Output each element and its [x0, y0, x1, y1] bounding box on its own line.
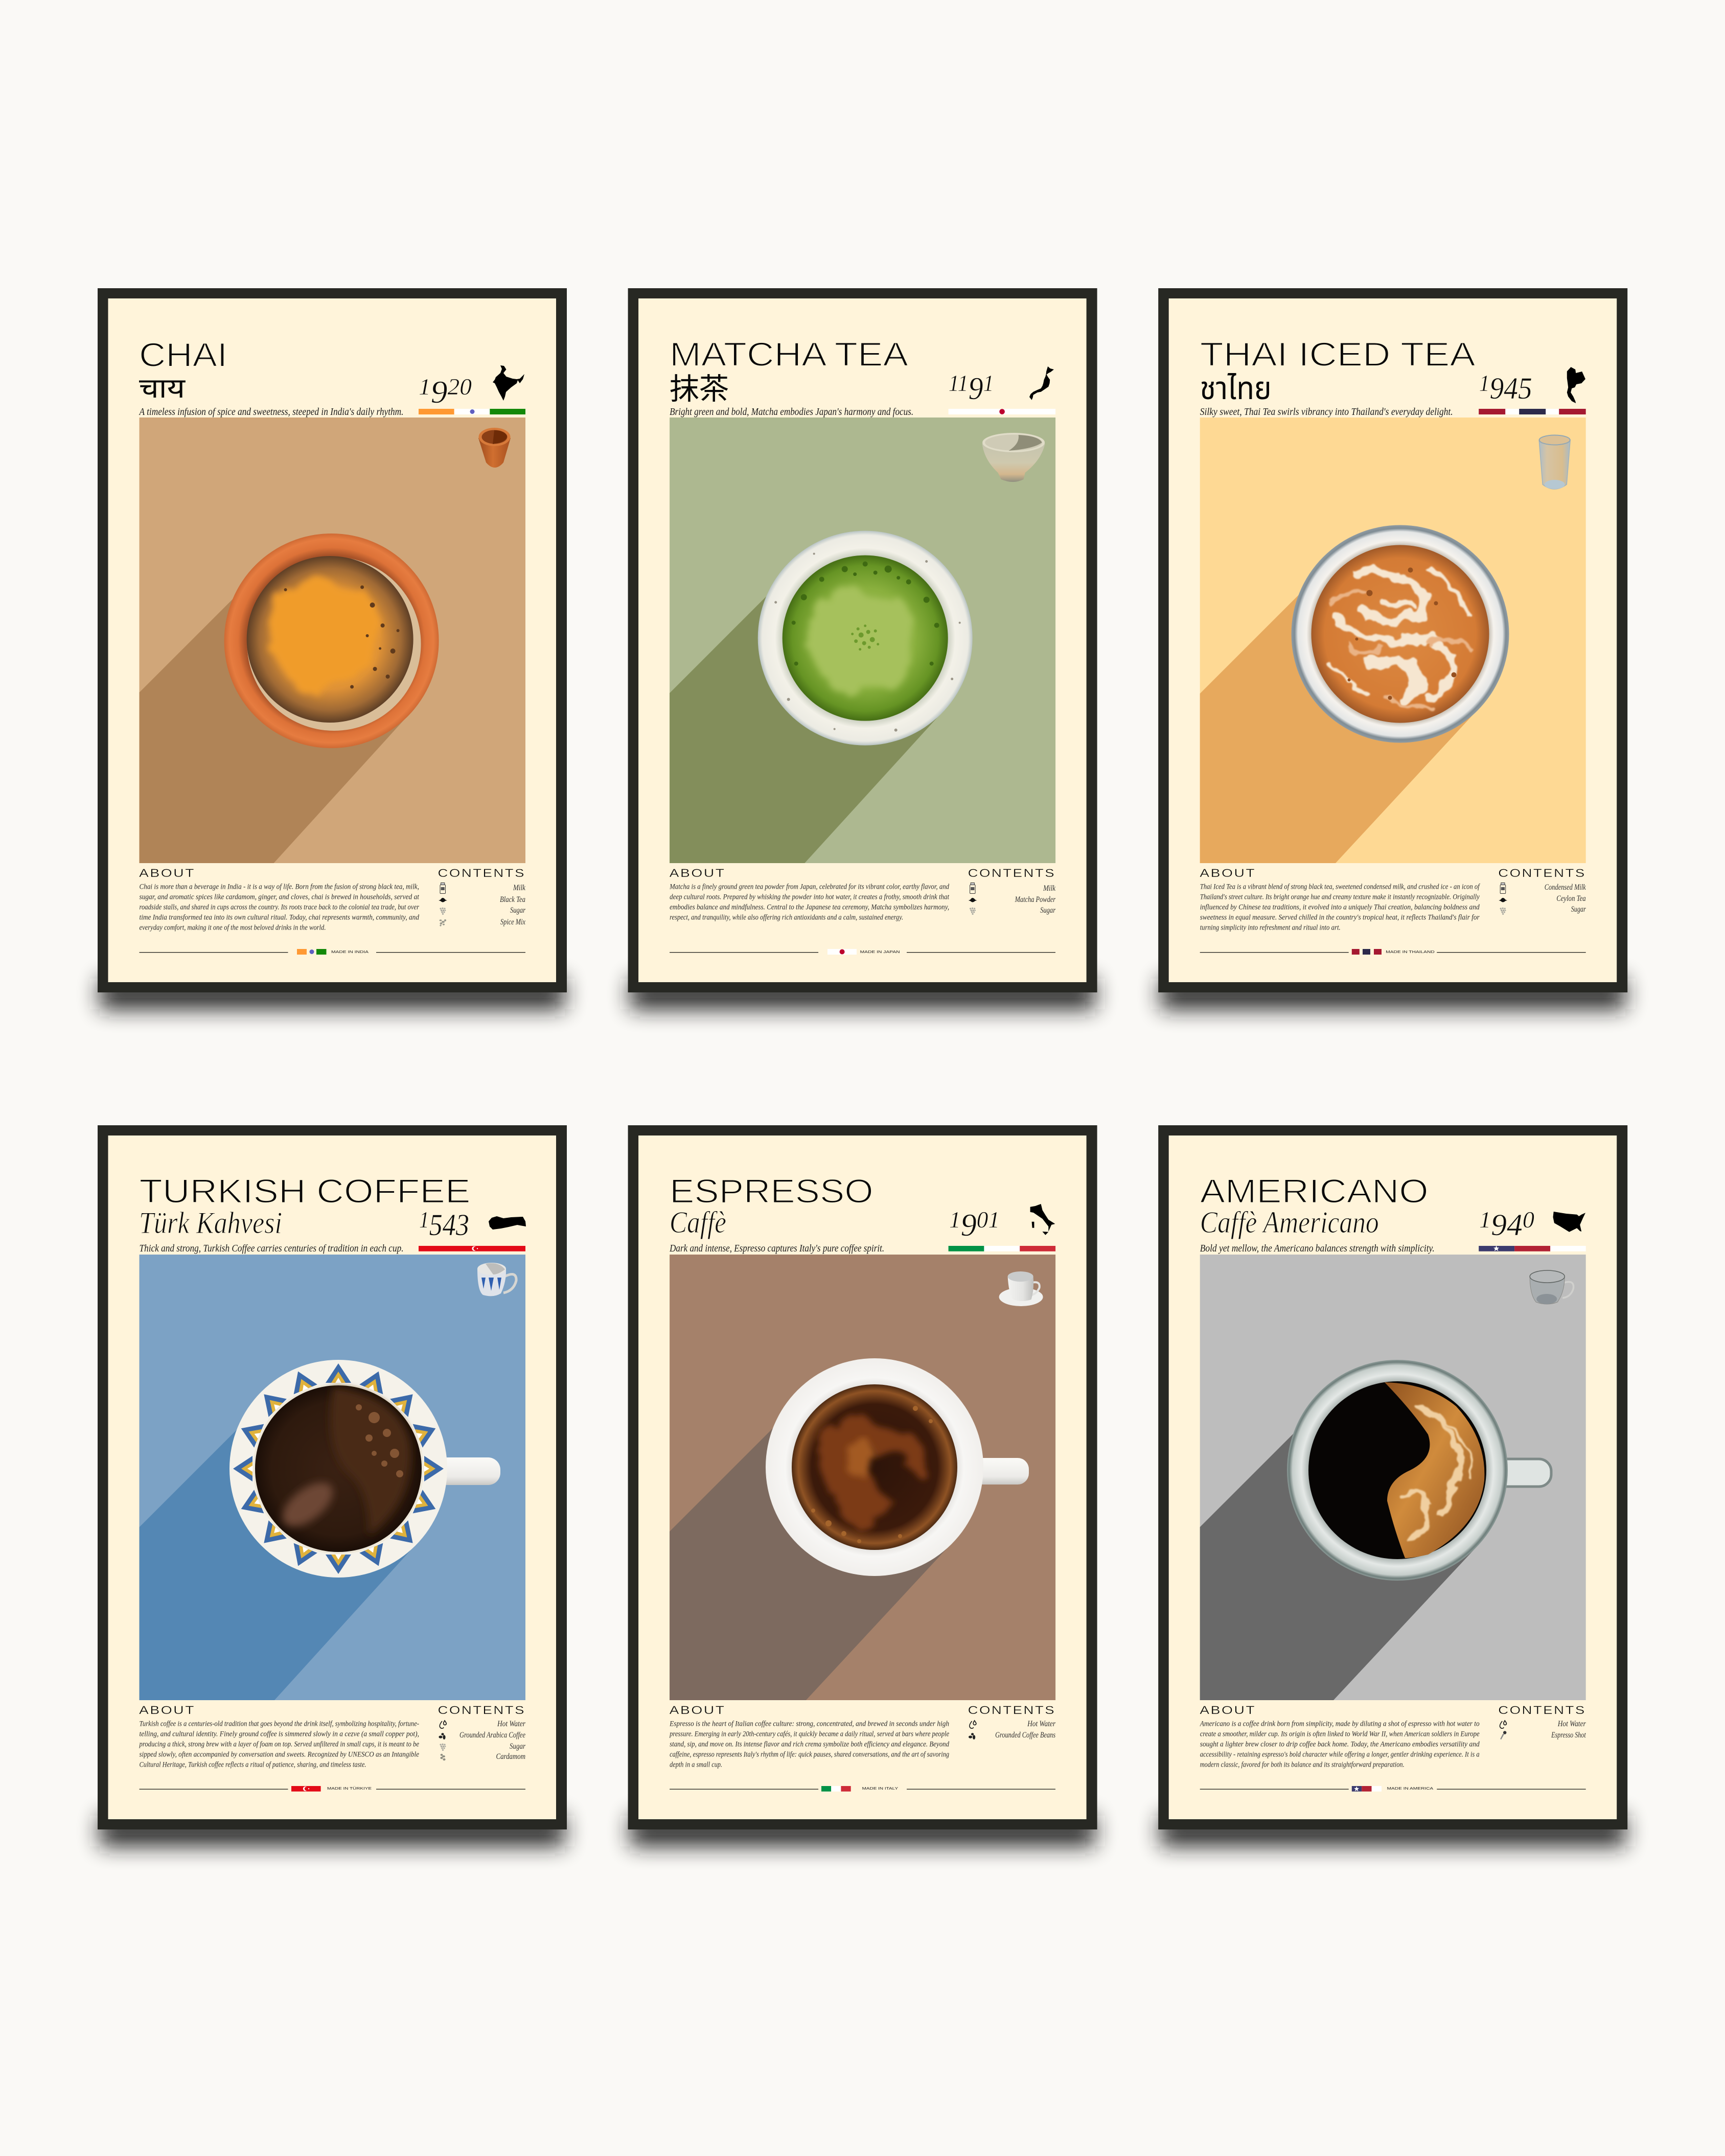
contents list: [439, 883, 526, 926]
footer: MADE IN TÜRKIYE: [327, 1786, 372, 1791]
about text: deep cultural roots. Prepared by whisking the powder into hot water, it creates a frothy, smooth drink that: [670, 893, 950, 901]
frame shadow: [100, 979, 565, 1009]
flag bar: India: [419, 409, 525, 414]
about text: [1200, 883, 1480, 932]
year: 1: [419, 374, 430, 400]
about text: everyday comfort, making it one of the most beloved drinks in the world.: [139, 924, 326, 932]
year: 1: [419, 1207, 430, 1233]
native name: Caffè Americano: [1200, 1205, 1379, 1239]
about text: sweetness in equal measure. Served chilled in the country's tropical heat, it reflects Thailand's flair for: [1200, 914, 1480, 922]
contents list: [1500, 1720, 1586, 1740]
about text: sipped slowly, often accompanied by conversation and sweets. Recognized by UNESCO as an Intangible: [139, 1751, 419, 1759]
about text: Matcha is a finely ground green tea powder from Japan, celebrated for its vibrant color, earthy flavor, and: [669, 883, 950, 891]
about text: turning simplicity into refreshment and ritual into art.: [1200, 924, 1341, 932]
heading: contents: CONTENTS: [1498, 1704, 1586, 1717]
contents list: Milk: [1043, 884, 1056, 893]
tagline: Bright green and bold, Matcha embodies Japan's harmony and focus.: [670, 406, 913, 418]
heading: contents: CONTENTS: [438, 1704, 525, 1717]
footer: MADE IN THAILAND: [1386, 949, 1435, 954]
hero: chai cup top view: [224, 534, 439, 748]
image panel: [670, 418, 1055, 863]
native name: ชาไทย: [1200, 371, 1272, 406]
footer: [139, 949, 525, 955]
heading: contents: CONTENTS: [1498, 867, 1586, 879]
title: ESPRESSO: [670, 1172, 873, 1210]
footer: [1200, 949, 1586, 955]
image panel: [139, 418, 525, 863]
year: 20: [447, 374, 472, 400]
contents list: Cardamom: [496, 1752, 525, 1761]
about text: telling, and cultural identity. Finely ground coffee is simmered slowly in a cezve (a small copper pot),: [139, 1730, 419, 1738]
year: 11: [949, 370, 970, 396]
native name: Caffè: [670, 1205, 726, 1239]
about text: influenced by Chinese tea traditions, it evolved into a uniquely Thai creation, balancing boldness and: [1200, 903, 1480, 912]
contents list: Sugar: [510, 906, 526, 915]
poster: americano: [1158, 1125, 1627, 1846]
footer: [139, 1786, 525, 1792]
frame: [1158, 288, 1627, 992]
year: 9: [431, 375, 447, 410]
heading: contents: CONTENTS: [438, 867, 525, 879]
year: 9: [969, 372, 983, 406]
about text: Chai is more than a beverage in India - it is a way of life. Born from the fusion of strong black tea, milk,: [139, 883, 419, 891]
year: 1: [949, 1207, 961, 1233]
icon: patterned mug: [477, 1263, 516, 1296]
about text: [669, 1720, 950, 1769]
paper: [638, 298, 1087, 982]
contents list: Grounded Arabica Coffee: [459, 1731, 525, 1740]
flag bar: USA: [1479, 1246, 1586, 1251]
icon: kulhad cup: [478, 428, 511, 468]
about text: [139, 1720, 419, 1769]
year: 1: [983, 370, 994, 396]
contents list: [439, 1720, 526, 1761]
year: 945: [1489, 372, 1532, 405]
about text: Thailand's street culture. Its bright orange hue and creamy texture make it instantly recognizable. Originally: [1200, 893, 1480, 901]
image panel: [670, 1255, 1055, 1700]
about text: sugar, and aromatic spices like cardamom, ginger, and cloves, chai is brewed in households, served at: [139, 893, 420, 901]
about text: caffeine, espresso represents Italy's rhythm of life: quick pauses, shared conversations, and the art of savoring: [670, 1751, 950, 1759]
native name: चाय: [139, 373, 186, 404]
image panel: [1200, 1255, 1586, 1700]
tagline: Silky sweet, Thai Tea swirls vibrancy into Thailand's everyday delight.: [1200, 406, 1453, 418]
about text: embodies balance and mindfulness. Central to the Japanese tea ceremony, Matcha symbolizes harmony,: [670, 903, 949, 912]
year: 0: [1523, 1207, 1534, 1233]
about text: pressure. Emerging in early 20th-century cafés, it quickly became a daily ritual, served at bars where people: [669, 1730, 949, 1738]
map: Japan: [1029, 366, 1054, 400]
heading: contents: CONTENTS: [968, 1704, 1055, 1717]
heading: contents: CONTENTS: [968, 867, 1055, 879]
about text: producing a thick, strong brew with a layer of foam on top. Served unfiltered in small cups, it is meant to be: [139, 1741, 419, 1749]
about text: Thai Iced Tea is a vibrant blend of strong black tea, sweetened condensed milk, and crushed ice - an icon of: [1200, 883, 1480, 891]
about text: time India transformed tea into its own cultural ritual. Today, chai represents warmth, community, and: [139, 914, 419, 922]
contents list: Sugar: [510, 1742, 526, 1751]
contents list: Espresso Shot: [1551, 1731, 1586, 1740]
frame shadow: [630, 1816, 1095, 1846]
hero: turkish coffee cup top view: [229, 1360, 500, 1578]
frame shadow: [1160, 979, 1625, 1009]
about text: create a smoother, milder cup. Its origin is often linked to World War II, when American soldiers in Europe: [1200, 1730, 1480, 1738]
map: USA: [1553, 1212, 1585, 1232]
map: Turkey: [489, 1216, 526, 1230]
hero: espresso cup top view: [766, 1358, 1029, 1576]
footer: [1200, 1786, 1586, 1792]
heading: about: ABOUT: [670, 1704, 726, 1717]
title: THAI ICED TEA: [1200, 336, 1476, 373]
contents list: Condensed Milk: [1545, 883, 1586, 892]
flag bar: Thailand: [1479, 409, 1586, 414]
frame: [628, 288, 1097, 992]
contents list: Matcha Powder: [1015, 895, 1056, 904]
poster: chai: [98, 288, 567, 1009]
footer: MADE IN AMERICA: [1387, 1786, 1434, 1791]
about text: [669, 883, 950, 922]
year: 01: [977, 1207, 1000, 1233]
map: India: [493, 365, 524, 401]
cup shadow: [139, 570, 407, 863]
contents list: Sugar: [1040, 906, 1056, 915]
paper: [638, 1135, 1087, 1819]
title: AMERICANO: [1200, 1172, 1429, 1210]
icon: matcha cup: [982, 433, 1045, 482]
map: Thailand: [1567, 367, 1585, 403]
icon: glass mug: [1530, 1270, 1574, 1304]
paper: [1169, 1135, 1617, 1819]
hero: americano glass top view: [1287, 1360, 1551, 1581]
year: 94: [1491, 1208, 1523, 1242]
year: 543: [429, 1208, 469, 1242]
frame shadow: [1160, 1816, 1625, 1846]
year: 1: [1479, 370, 1490, 396]
year: 1: [1479, 1207, 1490, 1233]
frame: [628, 1125, 1097, 1829]
native name: Türk Kahvesi: [139, 1206, 282, 1240]
frame shadow: [100, 1816, 565, 1846]
contents list: [969, 1720, 1056, 1740]
heading: about: ABOUT: [1200, 1704, 1256, 1717]
map: Italy: [1030, 1204, 1055, 1235]
cup shadow: [670, 1397, 951, 1700]
about text: [139, 883, 420, 932]
about text: Americano is a coffee drink born from simplicity, made by diluting a shot of espresso with hot water to: [1200, 1720, 1480, 1728]
flag bar: Italy: [949, 1246, 1055, 1251]
image panel: [139, 1255, 525, 1700]
cup shadow: [1200, 564, 1477, 863]
tagline: Bold yet mellow, the Americano balances strength with simplicity.: [1200, 1243, 1435, 1254]
hero: thai tea glass top view: [1291, 525, 1509, 743]
year: 9: [961, 1208, 977, 1243]
heading: about: ABOUT: [139, 867, 195, 879]
about text: roadside stalls, and shared in cups across the country. Its roots trace back to the colonial tea trade, but over: [139, 903, 419, 912]
heading: about: ABOUT: [670, 867, 726, 879]
poster: matcha tea: [628, 288, 1097, 1009]
flag bar: Japan: [949, 409, 1055, 414]
title: CHAI: [139, 336, 227, 374]
about text: stand, sip, and move on. Its intense flavor and rich crema symbolize both efficiency and elegance. Beyond: [670, 1741, 950, 1749]
contents list: Milk: [513, 884, 526, 892]
frame: [98, 288, 567, 992]
contents list: Hot Water: [1027, 1720, 1056, 1728]
footer: MADE IN INDIA: [331, 949, 369, 954]
cup shadow: [1200, 1400, 1475, 1700]
poster: espresso: [628, 1125, 1097, 1846]
contents list: Ceylon Tea: [1556, 894, 1586, 903]
about text: [1200, 1720, 1480, 1769]
flag bar: Türkiye: [419, 1246, 525, 1251]
frame: [1158, 1125, 1627, 1829]
about text: accessibility - retaining espresso's bold character while offering a longer, gentler drinking experience. It is a: [1200, 1751, 1480, 1759]
contents list: Hot Water: [1557, 1720, 1586, 1728]
about text: respect, and tranquility, while also offering rich antioxidants and a calm, sustained energy.: [670, 914, 903, 922]
about text: modern classic, favored for both its balance and its straightforward preparation.: [1200, 1761, 1405, 1769]
footer: MADE IN JAPAN: [860, 949, 900, 954]
title: TURKISH COFFEE: [139, 1172, 470, 1210]
contents list: [969, 883, 1056, 915]
icon: tall glass: [1539, 435, 1570, 489]
paper: [108, 1135, 556, 1819]
contents list: Sugar: [1571, 905, 1586, 914]
image panel: [1200, 418, 1586, 863]
about text: Espresso is the heart of Italian coffee culture: strong, concentrated, and brewed in seconds under high: [669, 1720, 949, 1728]
native name: 抹茶: [670, 373, 729, 406]
tagline: A timeless infusion of spice and sweetness, steeped in India's daily rhythm.: [139, 406, 404, 418]
about text: Cultural Heritage, Turkish coffee reflects a ritual of patience, sharing, and timeless taste.: [139, 1761, 366, 1769]
paper: [108, 298, 556, 982]
frame shadow: [630, 979, 1095, 1009]
title: MATCHA TEA: [670, 336, 908, 373]
poster: turkish coffee: [98, 1125, 567, 1846]
contents list: [1499, 883, 1586, 915]
footer: [670, 1786, 1055, 1792]
contents list: Black Tea: [500, 895, 525, 904]
paper: [1169, 298, 1617, 982]
heading: about: ABOUT: [139, 1704, 195, 1717]
about text: sought a lighter brew closer to drip coffee back home. Today, the Americano embodies versatility and: [1200, 1741, 1480, 1749]
tagline: Dark and intense, Espresso captures Italy's pure coffee spirit.: [669, 1243, 884, 1254]
heading: about: ABOUT: [1200, 867, 1256, 879]
footer: [670, 949, 1055, 955]
contents list: Grounded Coffee Beans: [995, 1731, 1055, 1740]
frame: [98, 1125, 567, 1829]
tagline: Thick and strong, Turkish Coffee carries centuries of tradition in each cup.: [139, 1243, 404, 1254]
contents list: Hot Water: [497, 1720, 526, 1728]
about text: depth in a small cup.: [670, 1761, 722, 1769]
hero: matcha bowl top view: [758, 531, 973, 746]
footer: MADE IN ITALY: [862, 1786, 898, 1791]
contents list: Spice Mix: [500, 918, 525, 926]
cup shadow: [670, 568, 941, 863]
cup shadow: [139, 1398, 415, 1700]
icon: white cup and saucer: [999, 1271, 1043, 1306]
poster: thai iced tea: [1158, 288, 1627, 1009]
about text: Turkish coffee is a centuries-old tradition that goes beyond the drink itself, symbolizing hospitality, fortune-: [139, 1720, 419, 1728]
